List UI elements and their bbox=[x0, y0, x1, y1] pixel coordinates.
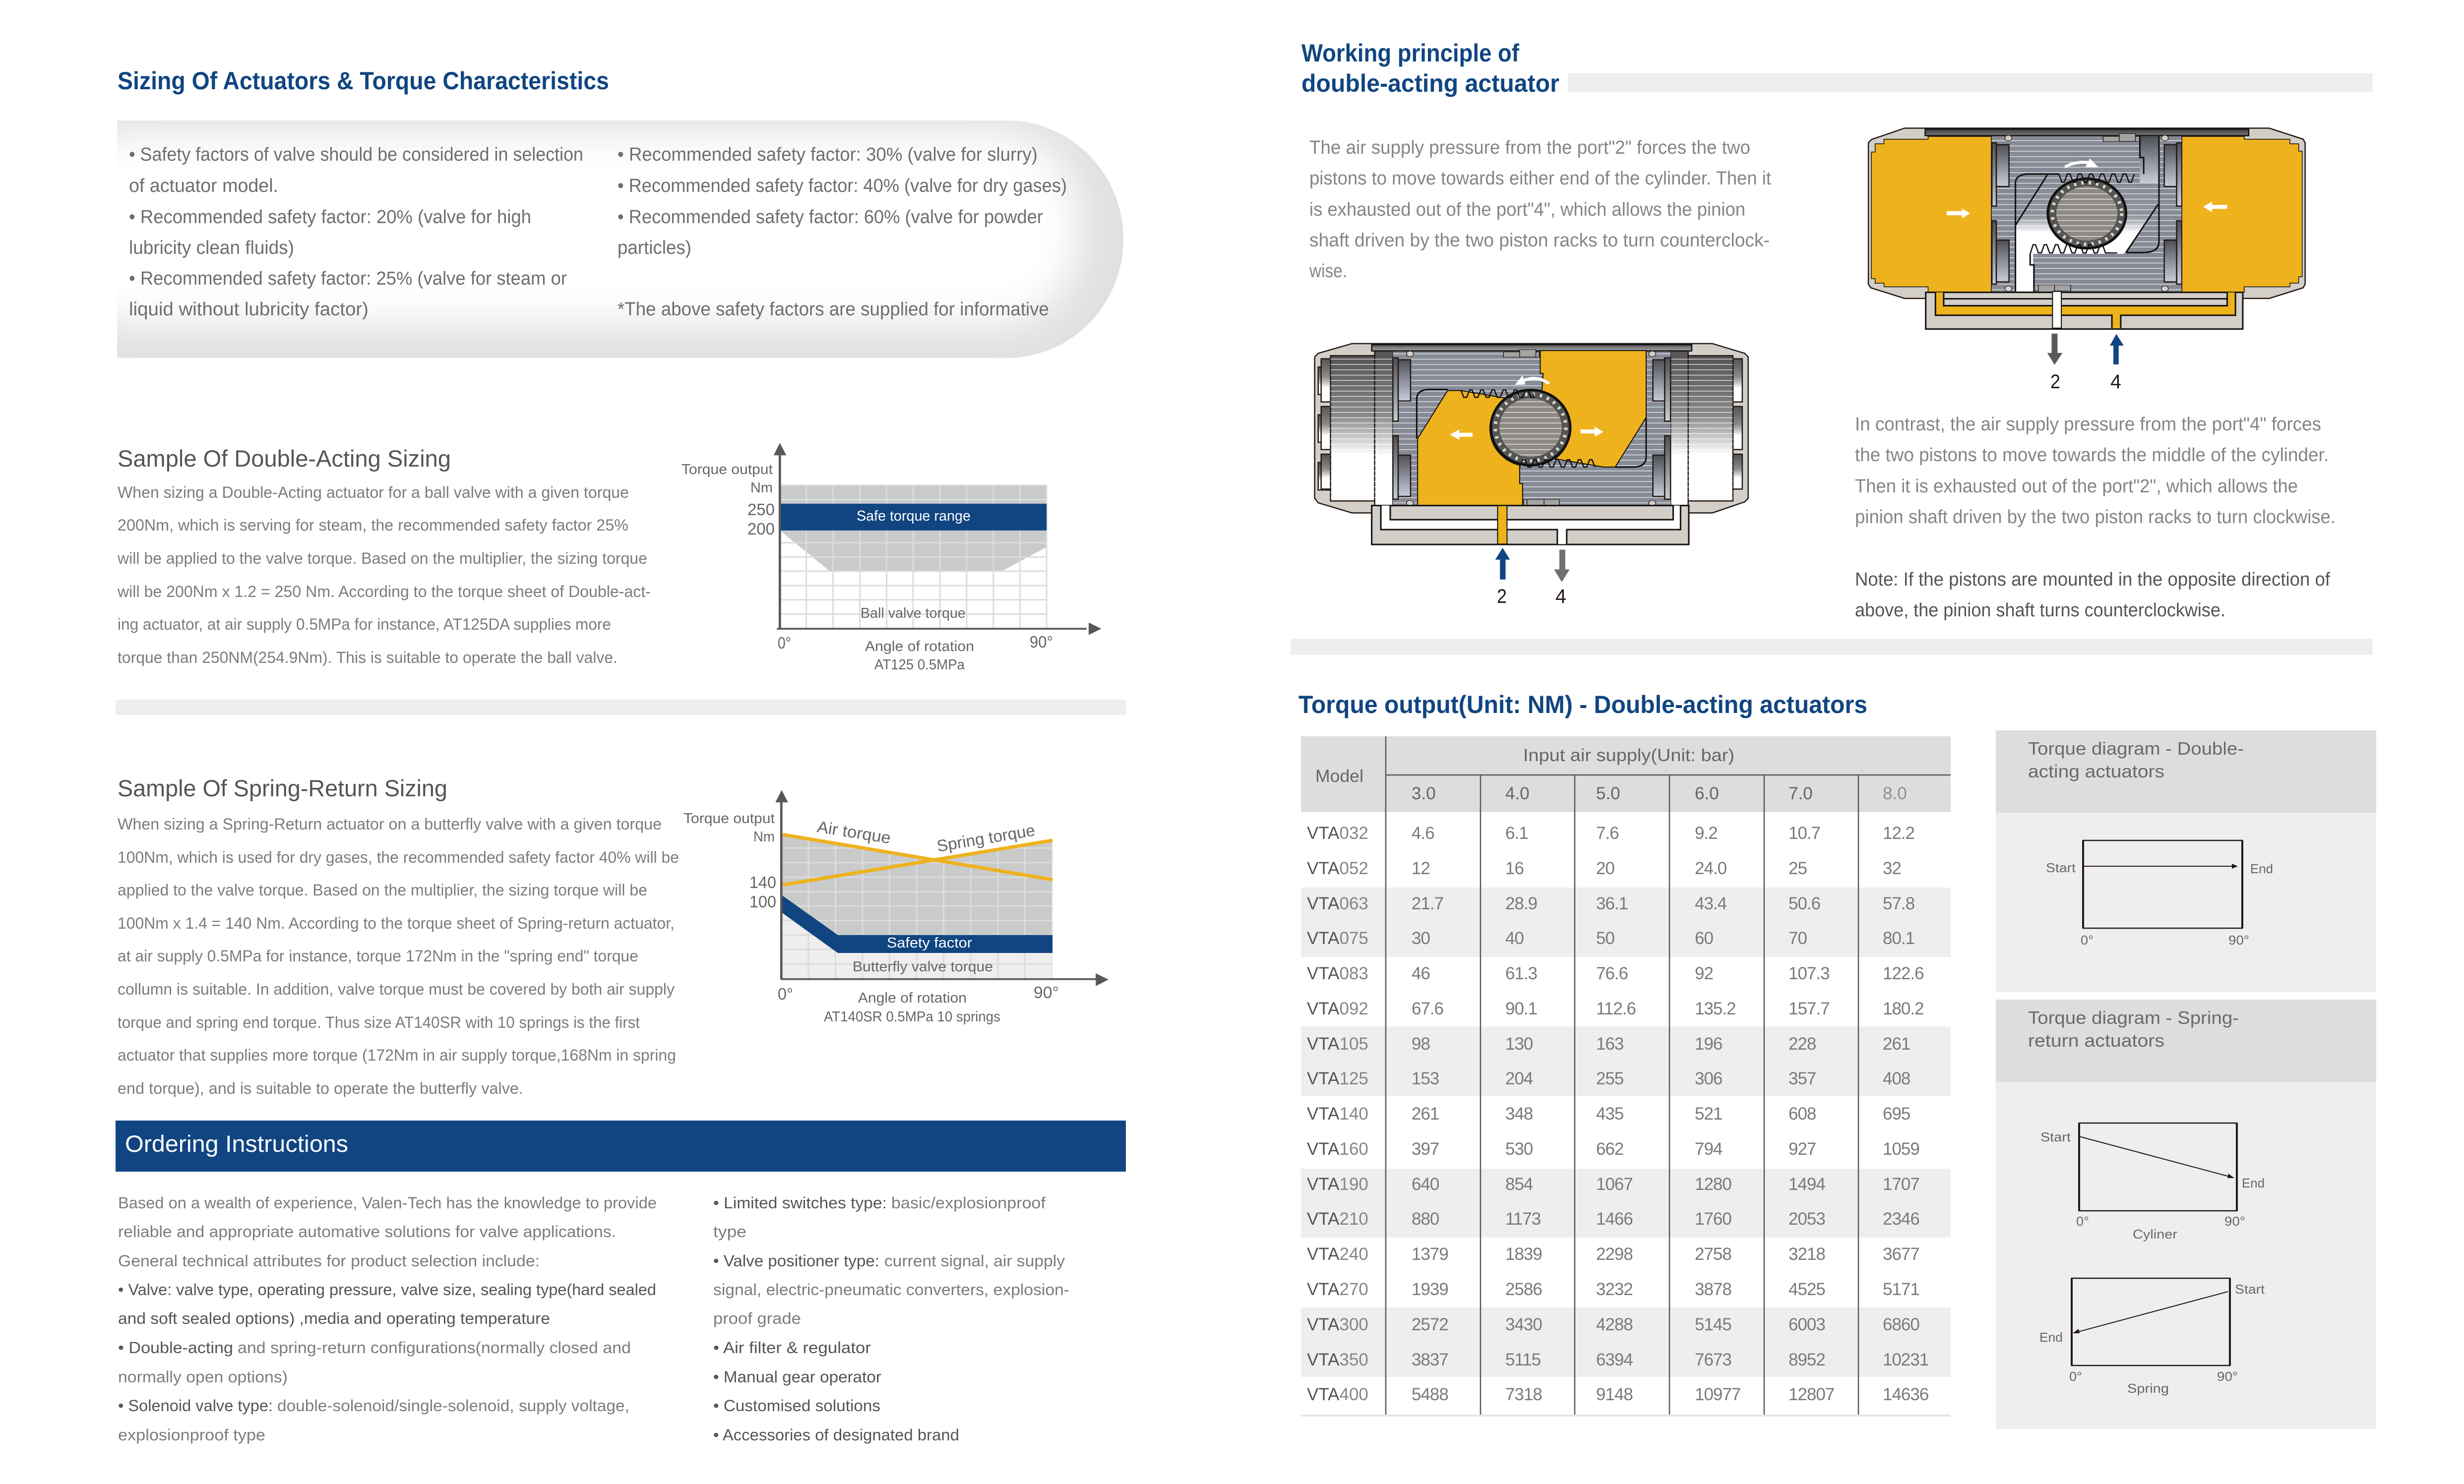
table: torque output: 40 bbox=[1505, 929, 1524, 948]
table: torque output: VTA075 bbox=[1307, 929, 1368, 948]
table header: 7.0 bbox=[1788, 784, 1813, 803]
table: torque output: 24.0 bbox=[1695, 859, 1727, 878]
chart: constant torque: 90° bbox=[2228, 933, 2249, 948]
panel: safety factors: particles) bbox=[617, 237, 691, 258]
table: torque output: 2586 bbox=[1505, 1280, 1542, 1299]
table: torque output: 7.6 bbox=[1596, 824, 1619, 843]
table: torque output: 122.6 bbox=[1883, 964, 1924, 983]
table: torque output: VTA092 bbox=[1307, 999, 1368, 1018]
chart: spring-return torque: Butterfly valve torque bbox=[853, 959, 993, 975]
table: torque output: 36.1 bbox=[1596, 894, 1628, 913]
table: torque output: 1466 bbox=[1596, 1209, 1633, 1229]
table: torque output: 408 bbox=[1883, 1069, 1910, 1088]
table: torque output: 1059 bbox=[1883, 1139, 1919, 1159]
chart: spring-return torque: Nm bbox=[753, 829, 775, 845]
table: torque output: VTA350 bbox=[1307, 1350, 1368, 1369]
text: spring-return sizing paragraph: at air supply 0.5MPa for instance, torque 172Nm in the "spring end" torque bbox=[118, 947, 638, 965]
chart: double-acting torque range: Ball valve torque bbox=[861, 605, 966, 621]
chart: spring-return torque: Torque output bbox=[683, 811, 775, 827]
text: ordering instructions left column: and spring-return configurations(normally closed and bbox=[238, 1339, 631, 1357]
table: torque output: 98 bbox=[1412, 1034, 1430, 1054]
text: port 2 description: The air supply pressure from the port"2" forces the two bbox=[1309, 137, 1750, 158]
table: torque output: VTA083 bbox=[1307, 964, 1368, 983]
diagram: actuator with air at port 2: 4 bbox=[1555, 586, 1566, 607]
text: ordering instructions left column: • Double-acting bbox=[118, 1339, 233, 1357]
table: torque output: 3677 bbox=[1883, 1245, 1919, 1264]
table: torque output: 1280 bbox=[1695, 1175, 1731, 1194]
table: torque output: 640 bbox=[1412, 1175, 1439, 1194]
heading: working principle: double-acting actuator bbox=[1301, 69, 1559, 97]
table: torque output: 530 bbox=[1505, 1139, 1533, 1159]
banner: ordering instructions bbox=[116, 1121, 1126, 1172]
table: torque output: 4525 bbox=[1788, 1280, 1825, 1299]
text: spring-return sizing paragraph: end torque), and is suitable to operate the butterfly valve. bbox=[118, 1079, 523, 1097]
table header bbox=[1301, 736, 1951, 812]
table: torque output: 130 bbox=[1505, 1034, 1533, 1054]
table: torque output: 695 bbox=[1883, 1104, 1910, 1124]
table: torque output: 8952 bbox=[1788, 1350, 1825, 1369]
table: torque output: 204 bbox=[1505, 1069, 1533, 1088]
chart: spring torque bbox=[2039, 1278, 2265, 1396]
table: torque output: 6.1 bbox=[1505, 824, 1528, 843]
chart: constant torque bbox=[2046, 840, 2273, 948]
text: ordering instructions left column: normally open options) bbox=[118, 1368, 288, 1386]
table: torque output: 1939 bbox=[1412, 1280, 1448, 1299]
table header: 5.0 bbox=[1596, 784, 1620, 803]
table: torque output: 2346 bbox=[1883, 1209, 1919, 1229]
chart: spring-return torque: 100 bbox=[749, 892, 776, 911]
table: torque output: 107.3 bbox=[1788, 964, 1830, 983]
chart: spring torque: End bbox=[2039, 1330, 2063, 1345]
chart: double-acting torque range: Nm bbox=[750, 480, 773, 496]
table: torque output: 5171 bbox=[1883, 1280, 1919, 1299]
panel: safety factors: • Recommended safety factor: 30% (valve for slurry) bbox=[617, 144, 1038, 165]
heading: double-acting sizing: Sample Of Double-Acting Sizing bbox=[118, 445, 451, 472]
text: ordering instructions left column: reliable and appropriate automative solutions for valve applications. bbox=[118, 1223, 616, 1241]
text: ordering instructions right column: • Customised solutions bbox=[713, 1397, 880, 1415]
table: torque output: 927 bbox=[1788, 1139, 1816, 1159]
diagram: actuator with air at port 4: 2 bbox=[2050, 371, 2060, 393]
table: torque output: 3232 bbox=[1596, 1280, 1633, 1299]
chart: spring torque: Start bbox=[2235, 1282, 2265, 1297]
table: torque output: VTA125 bbox=[1307, 1069, 1368, 1088]
table: torque output: 1760 bbox=[1695, 1209, 1731, 1229]
text: ordering instructions left column: General technical attributes for product selection include: bbox=[118, 1252, 540, 1270]
chart: double-acting torque range: 250 bbox=[747, 500, 775, 519]
panel: torque diagram spring-return: return actuators bbox=[2028, 1030, 2164, 1051]
table: torque output: 9.2 bbox=[1695, 824, 1718, 843]
text: ordering instructions right column: type bbox=[713, 1223, 746, 1241]
chart: double-acting torque range: Torque output bbox=[681, 462, 773, 477]
table: torque output: 794 bbox=[1695, 1139, 1723, 1159]
table: torque output: 2298 bbox=[1596, 1245, 1633, 1264]
chart: spring torque: 90° bbox=[2217, 1369, 2238, 1384]
heading: torque output table: Torque output(Unit: NM) - Double-acting actuators bbox=[1298, 691, 1867, 718]
table: torque output: VTA052 bbox=[1307, 859, 1368, 878]
chart: constant torque: Start bbox=[2046, 860, 2076, 875]
text: double-acting sizing paragraph: will be 200Nm x 1.2 = 250 Nm. According to the torque sheet of Double-act- bbox=[117, 583, 651, 600]
table: torque output: 180.2 bbox=[1883, 999, 1924, 1018]
table: torque output: 153 bbox=[1412, 1069, 1439, 1088]
panel: safety factors: lubricity clean fluids) bbox=[129, 237, 294, 258]
table: torque output: 1707 bbox=[1883, 1175, 1919, 1194]
text: spring-return sizing paragraph: 100Nm x 1.4 = 140 Nm. According to the torque sheet of Spring-return actuator, bbox=[118, 914, 675, 932]
table: torque output: 7318 bbox=[1505, 1385, 1542, 1404]
table: torque output: 521 bbox=[1695, 1104, 1722, 1124]
panel: safety factors bbox=[50, 120, 1129, 358]
heading: working principle: Working principle of bbox=[1301, 39, 1519, 67]
table header: 8.0 bbox=[1883, 784, 1907, 803]
table: torque output: 16 bbox=[1505, 859, 1524, 878]
panel: safety factors: • Recommended safety factor: 20% (valve for high bbox=[129, 207, 531, 228]
chart: spring torque: 0° bbox=[2069, 1369, 2082, 1384]
heading: working principle bbox=[1301, 39, 1559, 97]
text: ordering instructions right column: current signal, air supply bbox=[884, 1252, 1065, 1270]
table header: Input air supply(Unit: bar) bbox=[1523, 746, 1734, 765]
table: torque output: 261 bbox=[1883, 1034, 1910, 1054]
text: spring-return sizing paragraph: 100Nm, which is used for dry gases, the recommended safety factor 40% will be bbox=[118, 848, 679, 866]
table: torque output: 43.4 bbox=[1695, 894, 1727, 913]
table: torque output: VTA400 bbox=[1307, 1385, 1368, 1404]
table: torque output: 20 bbox=[1596, 859, 1614, 878]
chart: cylinder torque bbox=[2040, 1123, 2265, 1242]
table: torque output: 10.7 bbox=[1788, 824, 1820, 843]
table: torque output: 80.1 bbox=[1883, 929, 1914, 948]
table: torque output: VTA240 bbox=[1307, 1245, 1368, 1264]
table: torque output: 163 bbox=[1596, 1034, 1623, 1054]
table: torque output: 12 bbox=[1412, 859, 1430, 878]
panel: torque diagram double-acting bbox=[1996, 730, 2376, 992]
text: ordering instructions left column: double-solenoid/single-solenoid, supply voltage, bbox=[277, 1397, 629, 1415]
table: torque output: 112.6 bbox=[1596, 999, 1636, 1018]
table: torque output: 9148 bbox=[1596, 1385, 1633, 1404]
table: torque output: 5145 bbox=[1695, 1315, 1731, 1334]
chart: spring torque: Spring bbox=[2127, 1381, 2169, 1396]
banner: ordering instructions: Ordering Instructions bbox=[125, 1130, 348, 1157]
chart: double-acting torque range: 0° bbox=[778, 634, 791, 652]
table: torque output: 2572 bbox=[1412, 1315, 1448, 1334]
chart: double-acting torque range: AT125 0.5MPa bbox=[874, 657, 965, 673]
table: torque output: 10977 bbox=[1695, 1385, 1740, 1404]
table: torque output: VTA105 bbox=[1307, 1034, 1368, 1054]
table: torque output: 397 bbox=[1412, 1139, 1439, 1159]
text: port 4 description: pinion shaft driven by the two piston racks to turn clockwise. bbox=[1855, 507, 2336, 528]
table: torque output: 5115 bbox=[1505, 1350, 1540, 1369]
chart: spring-return torque: 0° bbox=[778, 985, 793, 1003]
chart: double-acting torque range: 200 bbox=[747, 520, 775, 538]
panel: safety factors: • Safety factors of valve should be considered in selection bbox=[129, 144, 583, 165]
table: torque output: VTA190 bbox=[1307, 1175, 1368, 1194]
table: torque output: 3430 bbox=[1505, 1315, 1542, 1334]
table: torque output: 3837 bbox=[1412, 1350, 1448, 1369]
text: spring-return sizing paragraph: torque and spring end torque. Thus size AT140SR with 10 springs is the first bbox=[118, 1013, 640, 1031]
table: torque output: 1379 bbox=[1412, 1245, 1448, 1264]
chart: cylinder torque: End bbox=[2242, 1176, 2265, 1190]
table: torque output: 10231 bbox=[1883, 1350, 1928, 1369]
divider bbox=[1568, 73, 2373, 92]
chart: spring-return torque: Air torque bbox=[816, 817, 892, 847]
panel: safety factors: • Recommended safety factor: 40% (valve for dry gases) bbox=[617, 176, 1067, 196]
table: torque output: 46 bbox=[1412, 964, 1430, 983]
chart: cylinder torque: 90° bbox=[2224, 1214, 2245, 1229]
chart: spring-return torque: Spring torque bbox=[935, 821, 1036, 855]
chart: spring-return torque: Safety factor bbox=[887, 935, 972, 951]
text: spring-return sizing paragraph: When sizing a Spring-Return actuator on a butterfly valve with a given torque bbox=[118, 815, 662, 833]
table: torque output: 1494 bbox=[1788, 1175, 1825, 1194]
text: double-acting sizing paragraph bbox=[117, 483, 651, 666]
text: port 4 description bbox=[1855, 414, 2336, 621]
divider bbox=[1291, 639, 2373, 655]
text: port 4 description: In contrast, the air supply pressure from the port"4" forces bbox=[1855, 414, 2321, 435]
table: torque output: 67.6 bbox=[1412, 999, 1443, 1018]
text: double-acting sizing paragraph: will be applied to the valve torque. Based on the multiplier, the sizing torque bbox=[117, 549, 647, 567]
chart: cylinder torque: 0° bbox=[2076, 1214, 2089, 1229]
text: port 4 description: Note: If the pistons are mounted in the opposite direction of bbox=[1855, 569, 2330, 590]
text: port 4 description: the two pistons to move towards the middle of the cylinder. bbox=[1855, 445, 2329, 466]
table: torque output: 348 bbox=[1505, 1104, 1533, 1124]
table: torque output: 357 bbox=[1788, 1069, 1816, 1088]
text: port 4 description: Then it is exhausted out of the port"2", which allows the bbox=[1855, 476, 2298, 497]
table: torque output: 3878 bbox=[1695, 1280, 1731, 1299]
text: ordering instructions right column: signal, electric-pneumatic converters, explosion- bbox=[713, 1281, 1069, 1299]
text: ordering instructions left column: Based on a wealth of experience, Valen-Tech has the knowledge to provide bbox=[118, 1194, 657, 1212]
table header: 3.0 bbox=[1412, 784, 1436, 803]
table: torque output: 306 bbox=[1695, 1069, 1722, 1088]
chart: spring-return torque: 90° bbox=[1034, 983, 1059, 1002]
table: torque output: 435 bbox=[1596, 1104, 1623, 1124]
table: torque output: 255 bbox=[1596, 1069, 1623, 1088]
table: torque output: VTA032 bbox=[1307, 824, 1368, 843]
table: torque output: 608 bbox=[1788, 1104, 1816, 1124]
table: torque output: 30 bbox=[1412, 929, 1430, 948]
table: torque output: 157.7 bbox=[1788, 999, 1830, 1018]
panel: safety factors: • Recommended safety factor: 60% (valve for powder bbox=[617, 207, 1043, 228]
text: ordering instructions left column: • Valve: valve type, operating pressure, valve size, sealing type(hard sealed bbox=[118, 1281, 656, 1299]
chart: double-acting torque range: Safe torque range bbox=[857, 508, 971, 524]
table: torque output: 14636 bbox=[1883, 1385, 1928, 1404]
text: spring-return sizing paragraph: actuator that supplies more torque (172Nm in air supply torque,168Nm in spring bbox=[118, 1046, 676, 1064]
text: ordering instructions right column: • Accessories of designated brand bbox=[713, 1426, 959, 1444]
table: torque output: 50 bbox=[1596, 929, 1614, 948]
text: ordering instructions right column: proof grade bbox=[713, 1309, 801, 1327]
text: ordering instructions left column: • Solenoid valve type: bbox=[118, 1397, 273, 1415]
table: torque output: VTA063 bbox=[1307, 894, 1368, 913]
table: torque output: 7673 bbox=[1695, 1350, 1731, 1369]
text: spring-return sizing paragraph bbox=[118, 815, 679, 1097]
table: torque output: 57.8 bbox=[1883, 894, 1914, 913]
table: torque output: 1839 bbox=[1505, 1245, 1542, 1264]
table: torque output: 25 bbox=[1788, 859, 1807, 878]
text: port 2 description bbox=[1309, 137, 1771, 282]
chart: spring-return torque: AT140SR 0.5MPa 10 springs bbox=[824, 1009, 1000, 1025]
table: torque output: 21.7 bbox=[1412, 894, 1443, 913]
panel: safety factors: *The above safety factors are supplied for informative bbox=[617, 299, 1049, 320]
table: torque output: 28.9 bbox=[1505, 894, 1537, 913]
text: ordering instructions left column bbox=[118, 1194, 657, 1444]
table: torque output: 60 bbox=[1695, 929, 1713, 948]
chart: spring-return torque: 140 bbox=[749, 873, 776, 891]
table: torque output: 2758 bbox=[1695, 1245, 1731, 1264]
table: torque output: 90.1 bbox=[1505, 999, 1537, 1018]
diagram: actuator with air at port 4: 4 bbox=[2110, 371, 2121, 393]
text: spring-return sizing paragraph: applied to the valve torque. Based on the multiplier, the sizing torque will be bbox=[118, 881, 647, 899]
text: spring-return sizing paragraph: collumn is suitable. In addition, valve torque must be covered by both air supply bbox=[118, 980, 675, 998]
text: double-acting sizing paragraph: 200Nm, which is serving for steam, the recommended safety factor 25% bbox=[118, 516, 628, 534]
text: double-acting sizing paragraph: When sizing a Double-Acting actuator for a ball valve with a given torque bbox=[118, 483, 629, 501]
table: torque output: 2053 bbox=[1788, 1209, 1825, 1229]
text: port 4 description: above, the pinion shaft turns counterclockwise. bbox=[1855, 600, 2225, 621]
panel: safety factors: liquid without lubricity factor) bbox=[129, 299, 369, 320]
heading: sizing of actuators: Sizing Of Actuators & Torque Characteristics bbox=[118, 67, 609, 95]
text: ordering instructions right column: • Limited switches type: bbox=[713, 1194, 887, 1212]
table: torque output: VTA140 bbox=[1307, 1104, 1368, 1124]
table: torque output: 3218 bbox=[1788, 1245, 1825, 1264]
table: torque output: 61.3 bbox=[1505, 964, 1537, 983]
panel: safety factors: of actuator model. bbox=[129, 176, 278, 196]
table: torque output: VTA270 bbox=[1307, 1280, 1368, 1299]
table: torque output: 32 bbox=[1883, 859, 1901, 878]
panel: torque diagram spring-return bbox=[1996, 1000, 2376, 1429]
diagram: actuator with air at port 4 bbox=[1868, 128, 2305, 393]
chart: double-acting torque range: 90° bbox=[1030, 633, 1053, 651]
text: port 2 description: pistons to move towards either end of the cylinder. Then it bbox=[1309, 168, 1771, 189]
table: torque output: VTA160 bbox=[1307, 1139, 1368, 1159]
table: torque output: 4288 bbox=[1596, 1315, 1633, 1334]
table: torque output: 1173 bbox=[1505, 1209, 1540, 1229]
chart: spring-return torque bbox=[683, 790, 1109, 1025]
panel: torque diagram double-acting: acting actuators bbox=[2028, 761, 2164, 781]
text: port 2 description: is exhausted out of the port"4", which allows the pinion bbox=[1309, 199, 1745, 220]
panel: torque diagram spring-return: Torque diagram - Spring- bbox=[2028, 1008, 2239, 1028]
table: torque output: 50.6 bbox=[1788, 894, 1820, 913]
panel: safety factors: • Recommended safety factor: 25% (valve for steam or bbox=[129, 268, 567, 289]
chart: constant torque: End bbox=[2250, 861, 2273, 876]
table: torque output: 135.2 bbox=[1695, 999, 1736, 1018]
heading: spring-return sizing: Sample Of Spring-Return Sizing bbox=[118, 775, 447, 801]
table: torque output: 6394 bbox=[1596, 1350, 1633, 1369]
table: torque output: 6860 bbox=[1883, 1315, 1919, 1334]
chart: cylinder torque: Start bbox=[2040, 1129, 2071, 1144]
text: double-acting sizing paragraph: torque than 250NM(254.9Nm). This is suitable to operate the ball valve. bbox=[118, 649, 617, 666]
chart: double-acting torque range: Angle of rotation bbox=[865, 639, 974, 654]
table: torque output: 1067 bbox=[1596, 1175, 1633, 1194]
table: torque output: 228 bbox=[1788, 1034, 1816, 1054]
text: ordering instructions right column: • Manual gear operator bbox=[713, 1368, 881, 1386]
table: torque output: 6003 bbox=[1788, 1315, 1825, 1334]
text: port 2 description: wise. bbox=[1309, 261, 1347, 282]
table: torque output: 662 bbox=[1596, 1139, 1623, 1159]
chart: double-acting torque range bbox=[681, 443, 1102, 673]
chart: spring-return torque: Angle of rotation bbox=[858, 990, 967, 1006]
table: torque output: 5488 bbox=[1412, 1385, 1448, 1404]
chart: constant torque: 0° bbox=[2081, 933, 2094, 948]
text: ordering instructions right column: • Valve positioner type: bbox=[713, 1252, 879, 1270]
table: torque output bbox=[1301, 736, 1951, 1416]
diagram: actuator with air at port 2 bbox=[1315, 344, 1748, 607]
text: port 2 description: shaft driven by the two piston racks to turn counterclock- bbox=[1309, 230, 1770, 251]
divider bbox=[116, 700, 1126, 715]
text: ordering instructions left column: and soft sealed options) ,media and operating temperature bbox=[118, 1309, 550, 1327]
table: torque output: VTA300 bbox=[1307, 1315, 1368, 1334]
text: ordering instructions right column: basic/explosionproof bbox=[891, 1194, 1046, 1212]
table: torque output: 261 bbox=[1412, 1104, 1439, 1124]
table: torque output: 70 bbox=[1788, 929, 1807, 948]
text: ordering instructions right column bbox=[713, 1194, 1069, 1444]
text: double-acting sizing paragraph: ing actuator, at air supply 0.5MPa for instance, AT125DA supplies more bbox=[118, 615, 611, 633]
table: torque output: 196 bbox=[1695, 1034, 1722, 1054]
table: torque output: 854 bbox=[1505, 1175, 1533, 1194]
table header: Model bbox=[1315, 767, 1363, 786]
text: ordering instructions right column: • Air filter & regulator bbox=[713, 1339, 871, 1357]
table: torque output: 880 bbox=[1412, 1209, 1439, 1229]
table header: 4.0 bbox=[1505, 784, 1530, 803]
diagram: actuator with air at port 2: 2 bbox=[1497, 586, 1507, 607]
table: torque output: 12.2 bbox=[1883, 824, 1914, 843]
table: torque output: 76.6 bbox=[1596, 964, 1628, 983]
table header: 6.0 bbox=[1695, 784, 1719, 803]
text: ordering instructions left column: explosionproof type bbox=[118, 1426, 265, 1444]
table: torque output: 4.6 bbox=[1412, 824, 1434, 843]
table: torque output: VTA210 bbox=[1307, 1209, 1368, 1229]
chart: cylinder torque: Cyliner bbox=[2133, 1227, 2177, 1242]
table: torque output: 92 bbox=[1695, 964, 1713, 983]
panel: torque diagram double-acting: Torque diagram - Double- bbox=[2028, 738, 2244, 759]
table: torque output: 12807 bbox=[1788, 1385, 1834, 1404]
